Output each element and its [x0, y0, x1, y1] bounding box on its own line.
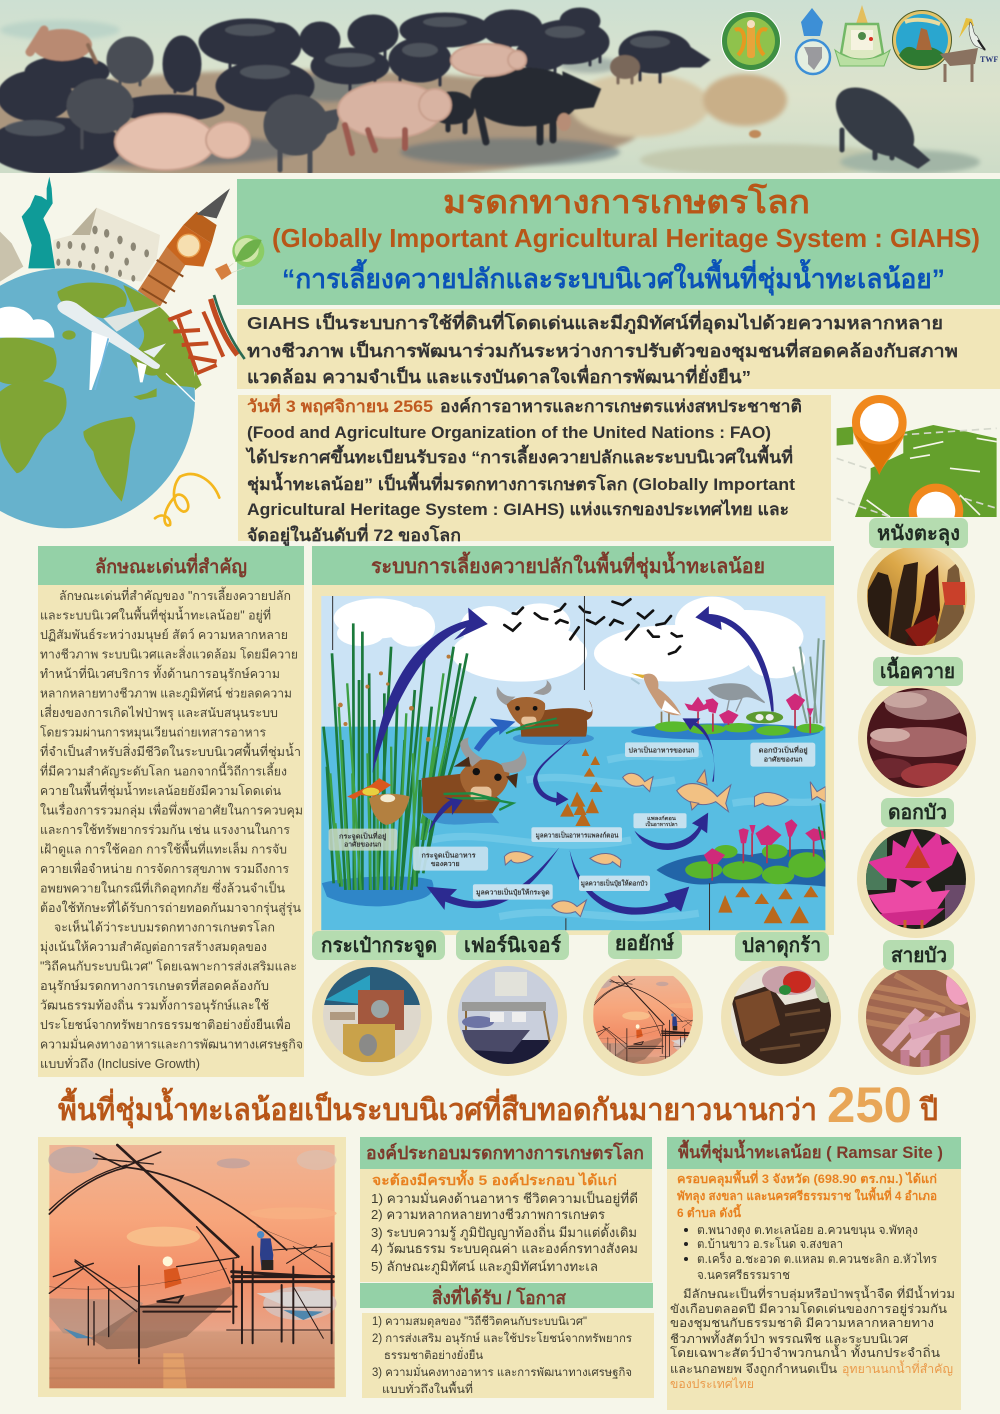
diagram: birds in flight	[504, 599, 682, 654]
logo: provincial crest	[835, 5, 890, 66]
heading: benefits and opportunities: สิ่งที่ได้รับ / โอกาส	[432, 1285, 567, 1308]
list: benefits: 1) ความสมดุลของ "วิถีชีวิตคนกับระบบนิเวศ"	[372, 1315, 587, 1328]
list: benefits: แบบทั่วถึงในพื้นที่	[382, 1381, 473, 1396]
diagram label: reeds are bird habitat: กระจูดเป็นที่อยู่	[339, 830, 386, 841]
diagram: upper buffalo with grass	[497, 680, 594, 745]
heading: 250 years of heritage: ปี	[918, 1094, 938, 1127]
diagram label: reeds are bird habitat: อาศัยของนก	[344, 841, 381, 849]
diagram: dung to reeds arrow	[427, 847, 559, 910]
text block: key characteristics body: ประโยชน์จากทรัพยากรธรรมชาติอย่างยั่งยืนเพื่อ	[40, 1016, 291, 1032]
label: reed bag	[312, 931, 445, 960]
text block: key characteristics body: ต้องใช้ทักษะที่ได้รับการถ่ายทอดกันมาจากรุ่นสู่รุ่น	[40, 899, 301, 916]
text block: FAO registration announcement: ชุ่มน้ำทะเลน้อย” เป็นพื้นที่มรดกทางการเกษตรโลก (Globally Important	[247, 471, 795, 495]
diagram: fish school	[504, 770, 825, 917]
text block: key characteristics body: เฝ้าดูแล การใช้คอก การใช้พื้นที่แทะเล็ม การจับ	[40, 840, 287, 858]
illustration: torii gate overlapping the panels	[168, 295, 245, 373]
text block: key characteristics body: ควายเพื่อจำหน่าย การจัดการสุขภาพ รวมถึงการ	[40, 860, 289, 877]
panel: heritage components	[360, 1137, 652, 1282]
panel: benefits and opportunities	[360, 1283, 654, 1398]
text block: key characteristics body: ทำหน้าที่นิเวศบริการ ทั้งด้านการอนุรักษ์ความ	[40, 664, 280, 682]
text: Ramsar description: อุทยานนกน้ำที่สำคัญ	[842, 1360, 953, 1377]
text block: FAO registration announcement	[238, 394, 831, 547]
diagram label: plankton feed fish	[633, 813, 687, 828]
text block: key characteristics body: เสี่ยงของการเกิดไฟป่าพรุ และสนับสนุนระบบ	[40, 704, 278, 721]
list: benefits: ธรรมชาติอย่างยั่งยืน	[384, 1347, 483, 1362]
diagram: arrow up to birds on right	[695, 606, 774, 712]
diagram: bird nest and oriole	[347, 778, 410, 825]
text: coverage	[677, 1169, 937, 1220]
diagram label: fish feed birds: ปลาเป็นอาหารของนก	[629, 745, 694, 754]
front dark buffalo	[432, 70, 598, 142]
text block: FAO registration announcement: วันที่ 3 พฤศจิกายน 2565	[247, 394, 433, 416]
illustration: globe with world landmarks	[0, 177, 230, 528]
heading: 250 years of heritage	[58, 1077, 938, 1133]
text: Ramsar description: มีลักษณะเป็นที่ราบลุ่มหรือป่าพรุน้ำจืด ที่มีน้ำท่วม	[683, 1285, 955, 1302]
text block: key characteristics body: ควายในพื้นที่ชุ่มน้ำทะเลน้อยยังมีความโดดเด่น	[40, 781, 281, 799]
circle photo: buffalo meat	[858, 679, 976, 797]
text: Ramsar description: และนกอพยพ จึงถูกกำหนดเป็น	[670, 1361, 837, 1377]
text block: key characteristics body: ลักษณะเด่นที่สำคัญของ "การเลี้ยงควายปลัก	[59, 586, 291, 603]
circle photo: lotus stems	[858, 957, 976, 1075]
grey buffalo	[68, 38, 928, 172]
title: English heading: (Globally Important Agricultural Heritage System : GIAHS)	[272, 223, 980, 253]
diagram: grey heron silhouette	[709, 684, 765, 713]
intro text block: GIAHS definition: GIAHS เป็นระบบการใช้ที่ดินที่โดดเด่นและมีภูมิทัศน์ที่อุดมไปด้วยความหลากหลาย	[247, 310, 943, 335]
diagram label: reeds are buffalo food: กระจูดเป็นอาหาร	[422, 850, 476, 860]
grey highlights on back	[5, 17, 670, 136]
list: sub-districts: ต.บ้านขาว อ.ระโนด จ.สงขลา	[697, 1237, 843, 1251]
diagram label: reeds are buffalo food	[413, 847, 488, 871]
logo: agriculture department seal	[722, 12, 780, 70]
diagram: arrow from reeds to birds	[373, 608, 488, 773]
diagram: dung to lotus arrow	[570, 850, 689, 915]
intro text block: GIAHS definition	[237, 309, 1000, 389]
panel: Ramsar site	[667, 1137, 961, 1410]
label: buffalo meat: เนื้อควาย	[880, 656, 955, 683]
diagram label: dung fertilizes reeds: มูลควายเป็นปุ๋ยให้กระจูด	[476, 887, 550, 897]
diagram label: reeds are bird habitat	[329, 829, 397, 851]
text: Ramsar description	[670, 1285, 955, 1391]
diagram: vertical frame lines	[333, 596, 710, 931]
heading: key characteristics: ลักษณะเด่นที่สำคัญ	[95, 553, 247, 578]
circle photo: reed bags	[312, 958, 432, 1076]
list: benefits: 2) การส่งเสริม อนุรักษ์ และใช้ประโยชน์จากทรัพยากร	[372, 1331, 632, 1345]
text block: key characteristics body: และระบบนิเวศในพื้นที่ชุ่มน้ำทะเลน้อย" อยู่ที่	[40, 606, 271, 624]
text block: key characteristics body: ปฏิสัมพันธ์ระหว่างมนุษย์ สัตว์ ความหลากหลาย	[40, 628, 288, 643]
text: coverage: พัทลุง สงขลา และนครศรีธรรมราช ในพื้นที่ 4 อำเภอ	[677, 1186, 937, 1204]
text block: key characteristics body	[40, 586, 303, 1071]
diagram sky and clouds	[321, 596, 825, 729]
text block: FAO registration announcement: Agricultural Heritage System : GIAHS) แห่งแรกของประเทศไทย และ	[247, 499, 789, 519]
list: five components: 3) ระบบความรู้ ภูมิปัญญาท้องถิ่น มีมาแต่ดั้งเดิม	[371, 1223, 637, 1241]
illustration: cloud	[0, 307, 54, 338]
decoration: yellow scribble	[155, 474, 219, 525]
heading: heritage components: องค์ประกอบมรดกทางการเกษตรโลก	[366, 1142, 644, 1163]
text: Ramsar description: ของชุมชนกับธรรมชาติ มีความหลากหลายทาง	[670, 1316, 934, 1331]
pin: lower location	[908, 484, 964, 517]
heading: 250 years of heritage: พื้นที่ชุ่มน้ำทะเลน้อยเป็นระบบนิเวศที่สืบทอดกันมายาวนานกว่า	[58, 1087, 817, 1129]
label: giant lift net	[608, 930, 682, 959]
text block: key characteristics body: ความมั่นคงทางอาหารและการพัฒนาทางเศรษฐกิจ	[40, 1036, 303, 1052]
intro text block: GIAHS definition: แวดล้อม ความจำเป็น และแรงบันดาลใจเพื่อการพัฒนาที่ยั่งยืน”	[247, 364, 751, 387]
diagram label: plankton feed fish: แพลงก์ตอน	[647, 815, 677, 822]
text block: FAO registration announcement: (Food and Agriculture Organization of the United Nations : FAO)	[247, 423, 771, 442]
diagram: buffalo dung	[560, 748, 818, 923]
diagram: lower lotus pond	[656, 803, 825, 887]
diagram label: fish feed birds	[625, 742, 699, 757]
pin: upper location	[852, 395, 907, 475]
label: furniture: เฟอร์นิเจอร์	[464, 934, 561, 957]
label: shadow puppet	[869, 518, 968, 548]
text: coverage: 6 ตำบล ดังนี้	[677, 1203, 742, 1220]
logo: Phatthalung seal	[892, 10, 952, 70]
illustration: green hot-air balloon	[215, 235, 264, 280]
circle photo: giant lift net	[583, 958, 703, 1082]
back row buffalo	[0, 9, 708, 173]
header photo: water buffalo herd in the lake	[0, 0, 1000, 180]
label: lotus stem: สายบัว	[891, 945, 947, 967]
heading: Ramsar site: พื้นที่ชุ่มน้ำทะเลน้อย ( Ramsar Site )	[678, 1139, 943, 1163]
label: reed bag: กระเป๋ากระจูด	[321, 935, 437, 959]
list: five components: 1) ความมั่นคงด้านอาหาร ชีวิตความเป็นอยู่ที่ดี	[371, 1189, 638, 1207]
diagram: lower buffalo with grass	[422, 737, 526, 825]
diagram label: lotus is bird habitat: ดอกบัวเป็นที่อยู่	[759, 745, 808, 756]
heading: 250 years of heritage: 250	[827, 1077, 912, 1133]
text: five components required: จะต้องมีครบทั้ง 5 องค์ประกอบ ได้แก่	[372, 1169, 617, 1188]
landmark: ruin at left	[0, 232, 23, 282]
diagram label: dung fertilizes lotus	[579, 876, 650, 891]
text: Ramsar description: ขังเกือบตลอดปี มีความโดดเด่นของการอยู่ร่วมกัน	[670, 1302, 947, 1317]
list: five components	[371, 1189, 638, 1275]
text block: key characteristics body: อนุรักษ์มรดกทางการเกษตรที่สอดคล้องกับ	[40, 977, 269, 994]
title: quoted subject line: “การเลี้ยงควายปลักและระบบนิเวศในพื้นที่ชุ่มน้ำทะเลน้อย”	[282, 258, 945, 296]
label: shadow puppet: หนังตะลุง	[877, 523, 960, 546]
diagram: arrow reeds to lower buffalo	[428, 797, 463, 833]
text block: key characteristics body: ที่มีความสำคัญระดับโลก นอกจากนี้วิถีการเลี้ยง	[40, 762, 287, 778]
diagram water	[321, 727, 825, 931]
diagram: heron with fish	[631, 673, 681, 723]
logo: university crest	[796, 8, 830, 74]
diagram: arrow fish to heron	[682, 718, 714, 782]
panel: buffalo raising system diagram	[312, 546, 834, 935]
diagram label: reeds are buffalo food: ของควาย	[431, 861, 460, 868]
diagram label: dung feeds plankton: มูลควายเป็นอาหารแพลงก์ตอน	[536, 830, 619, 840]
label: buffalo meat	[873, 656, 963, 686]
panel: key characteristics	[38, 546, 304, 1077]
text: Ramsar description: โดยเฉพาะสัตว์ป่าจำพวกนกน้ำ ทั้งนกประจำถิ่น	[670, 1344, 940, 1360]
diagram: background reeds right	[793, 638, 824, 723]
label: fermented catfish: ปลาดุกร้า	[742, 934, 821, 958]
logo: TWF stork and buffalo	[940, 18, 998, 82]
list: benefits: 3) ความมั่นคงทางอาหาร และการพัฒนาทางเศรษฐกิจ	[372, 1364, 632, 1379]
list: sub-districts	[684, 1223, 938, 1282]
diagram: arrow to upper buffalo	[474, 718, 516, 752]
text block: key characteristics body: ในเรื่องการรวมกลุ่ม เพื่อพึ่งพาอาศัยในการควบคุม	[40, 802, 303, 818]
label: fermented catfish	[735, 932, 829, 961]
diagram: plankton arrow to fish	[634, 813, 708, 850]
diagram label: lotus is bird habitat: อาศัยของนก	[764, 755, 803, 763]
diagram label: dung fertilizes reeds	[473, 884, 553, 900]
list: five components: 4) วัฒนธรรม ระบบคุณค่า และองค์กรทางสังคม	[371, 1241, 638, 1257]
text block: FAO registration announcement: องค์การอาหารและการเกษตรแห่งสหประชาชาติ	[440, 396, 802, 416]
list: sub-districts: ต.เคร็ง อ.ชะอวด ต.แหลม ต.ควนชะลิก อ.หัวไทร	[697, 1251, 938, 1266]
list: sub-districts: ต.พนางตุง ต.ทะเลน้อย อ.ควนขนุน จ.พัทลุง	[697, 1223, 918, 1238]
landmark: statue of liberty	[22, 177, 55, 268]
illustration: airplane	[57, 301, 195, 402]
text block: key characteristics body: ที่จำเป็นสำหรับสิ่งมีชีวิตในระบบนิเวศพื้นที่ชุ่มน้ำ	[40, 742, 301, 760]
diagram label: lotus is bird habitat	[750, 743, 815, 767]
text block: key characteristics body: ทางชีวภาพ ระบบนิเวศและสิ่งแวดล้อม โดยมีควาย	[40, 646, 298, 662]
diagram label: dung feeds plankton	[531, 827, 622, 842]
label: furniture	[456, 930, 569, 960]
text block: key characteristics body: "วิถีคนกับระบบนิเวศ" โดยเฉพาะการส่งเสริมและ	[40, 958, 297, 974]
title: Thai heading: มรดกทางการเกษตรโลก	[443, 183, 810, 220]
logo: TWF stork and buffalo: TWF	[980, 55, 998, 64]
illustration: map with location pins	[836, 395, 997, 517]
text block: FAO registration announcement: จัดอยู่ในอันดับที่ 72 ของโลก	[247, 523, 461, 547]
pink buffalo	[115, 44, 526, 170]
intro text block: GIAHS definition: ทางชีวภาพ เป็นการพัฒนาร่วมกันระหว่างการปรับตัวของชุมชนที่สอดคล้องกับสภาพ	[247, 338, 958, 362]
list: five components: 5) ลักษณะภูมิทัศน์ และภูมิทัศน์ทางทะเล	[371, 1259, 598, 1275]
text: coverage: ครอบคลุมพื้นที่ 3 จังหวัด (698.90 ตร.กม.) ได้แก่	[677, 1169, 937, 1187]
text block: key characteristics body: มุ่งเน้นให้ความสำคัญต่อการสร้างสมดุลของ	[40, 940, 267, 955]
diagram label: plankton feed fish: เป็นอาหารปลา	[645, 820, 678, 828]
label: giant lift net: ยอยักษ์	[615, 932, 674, 955]
list: benefits	[372, 1315, 632, 1396]
label: lotus: ดอกบัว	[888, 802, 947, 824]
landmark: colosseum	[53, 208, 160, 282]
text block: key characteristics body: และการใช้ทรัพยากรร่วมกัน เช่น แรงงานในการ	[40, 823, 290, 837]
illustration: earth globe	[0, 268, 202, 528]
text block: FAO registration announcement: ได้ประกาศขึ้นทะเบียนรับรอง “การเลี้ยงควายปลักและระบบนิเวศในพื้นที่	[245, 444, 793, 467]
diagram reed bed	[322, 623, 476, 906]
list: five components: 2) ความหลากหลายทางชีวภาพการเกษตร	[371, 1207, 605, 1222]
text block: key characteristics body: อพยพควายในกรณีที่เกิดอุทกภัย ซึ่งล้วนจำเป็น	[40, 880, 285, 896]
label: lotus	[881, 798, 954, 827]
text block: key characteristics body: วัฒนธรรมท้องถิ่น รวมทั้งการอนุรักษ์และใช้	[40, 996, 269, 1014]
title panel	[237, 179, 1000, 305]
diagram label: dung fertilizes lotus: มูลควายเป็นปุ๋ยให้ดอกบัว	[581, 879, 648, 889]
diagram: arrow to dung pile	[533, 738, 572, 806]
heading: buffalo raising system: ระบบการเลี้ยงควายปลักในพื้นที่ชุ่มน้ำทะเลน้อย	[371, 551, 765, 579]
label: lotus stem	[883, 940, 954, 970]
panel: sunset fishing net photo	[38, 1137, 346, 1397]
text: Ramsar description: ของประเทศไทย	[670, 1377, 754, 1391]
text block: key characteristics body: จะเห็นได้ว่าระบบมรดกทางการเกษตรโลก	[54, 920, 275, 934]
list: sub-districts: จ.นครศรีธรรมราช	[697, 1268, 790, 1282]
circle photo: lotus flower	[857, 820, 975, 938]
landmark: big ben tower	[137, 188, 230, 307]
text block: key characteristics body: แบบทั่วถึง (Inclusive Growth)	[40, 1055, 200, 1071]
diagram: wetland ecosystem cycle	[321, 596, 825, 931]
circle photo: fermented catfish	[721, 958, 841, 1076]
circle photo: shadow puppets	[857, 537, 975, 655]
circle photo: furniture	[447, 958, 567, 1076]
text: Ramsar description: ชีวภาพทั้งสัตว์ป่า พรรณพืช และระบบนิเวศ	[670, 1330, 908, 1346]
diagram: upper lotus group	[631, 693, 824, 740]
text block: key characteristics body: โดยรวมผ่านการหมุนเวียนถ่ายเทสารอาหาร	[40, 724, 266, 740]
text block: key characteristics body: หลากหลายทางชีวภาพ และภูมิทัศน์ ช่วยลดความ	[40, 686, 292, 702]
